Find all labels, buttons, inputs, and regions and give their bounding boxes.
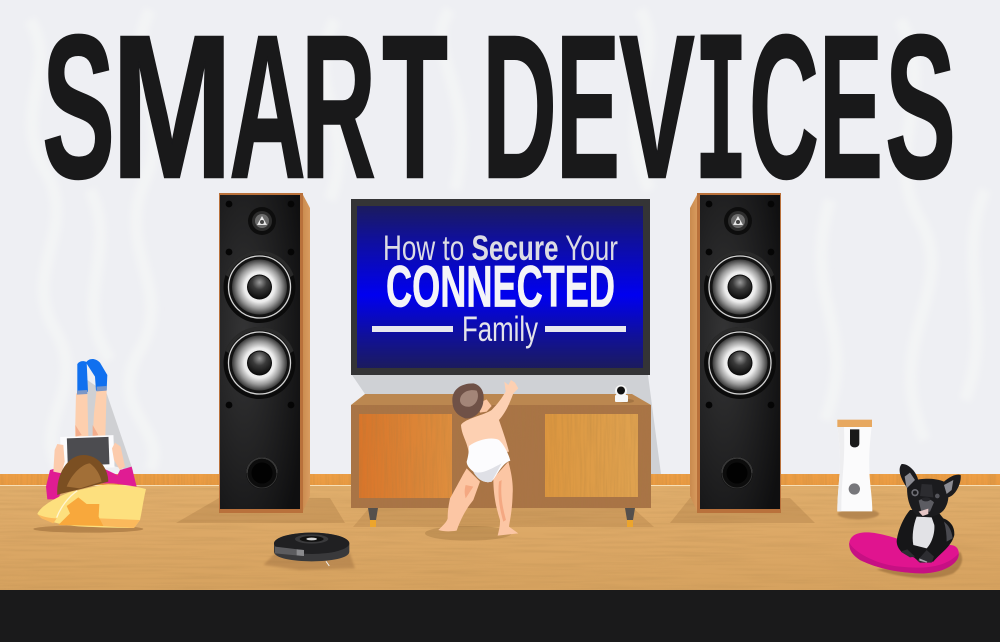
screen text: Family	[462, 310, 538, 349]
screen text: CONNECTED	[386, 254, 615, 320]
girl with tablet	[33, 359, 146, 533]
screen text: How to Secure Your	[383, 229, 618, 268]
pet treat dispenser camera	[837, 420, 879, 519]
wall background	[0, 0, 1000, 480]
title: I	[694, 0, 748, 242]
wall shadow behind tv and cabinet	[352, 375, 661, 474]
robot vacuum	[263, 533, 355, 570]
bottom black band	[0, 590, 1000, 642]
right speaker	[670, 193, 815, 523]
baby	[425, 380, 518, 541]
left speaker	[176, 193, 345, 523]
tv cabinet	[351, 394, 654, 527]
screen text	[372, 229, 626, 349]
television	[351, 199, 650, 375]
security camera	[615, 385, 634, 403]
wood floor	[0, 486, 1000, 590]
baseboard	[0, 474, 1000, 486]
dog on magenta cushion	[849, 464, 962, 578]
